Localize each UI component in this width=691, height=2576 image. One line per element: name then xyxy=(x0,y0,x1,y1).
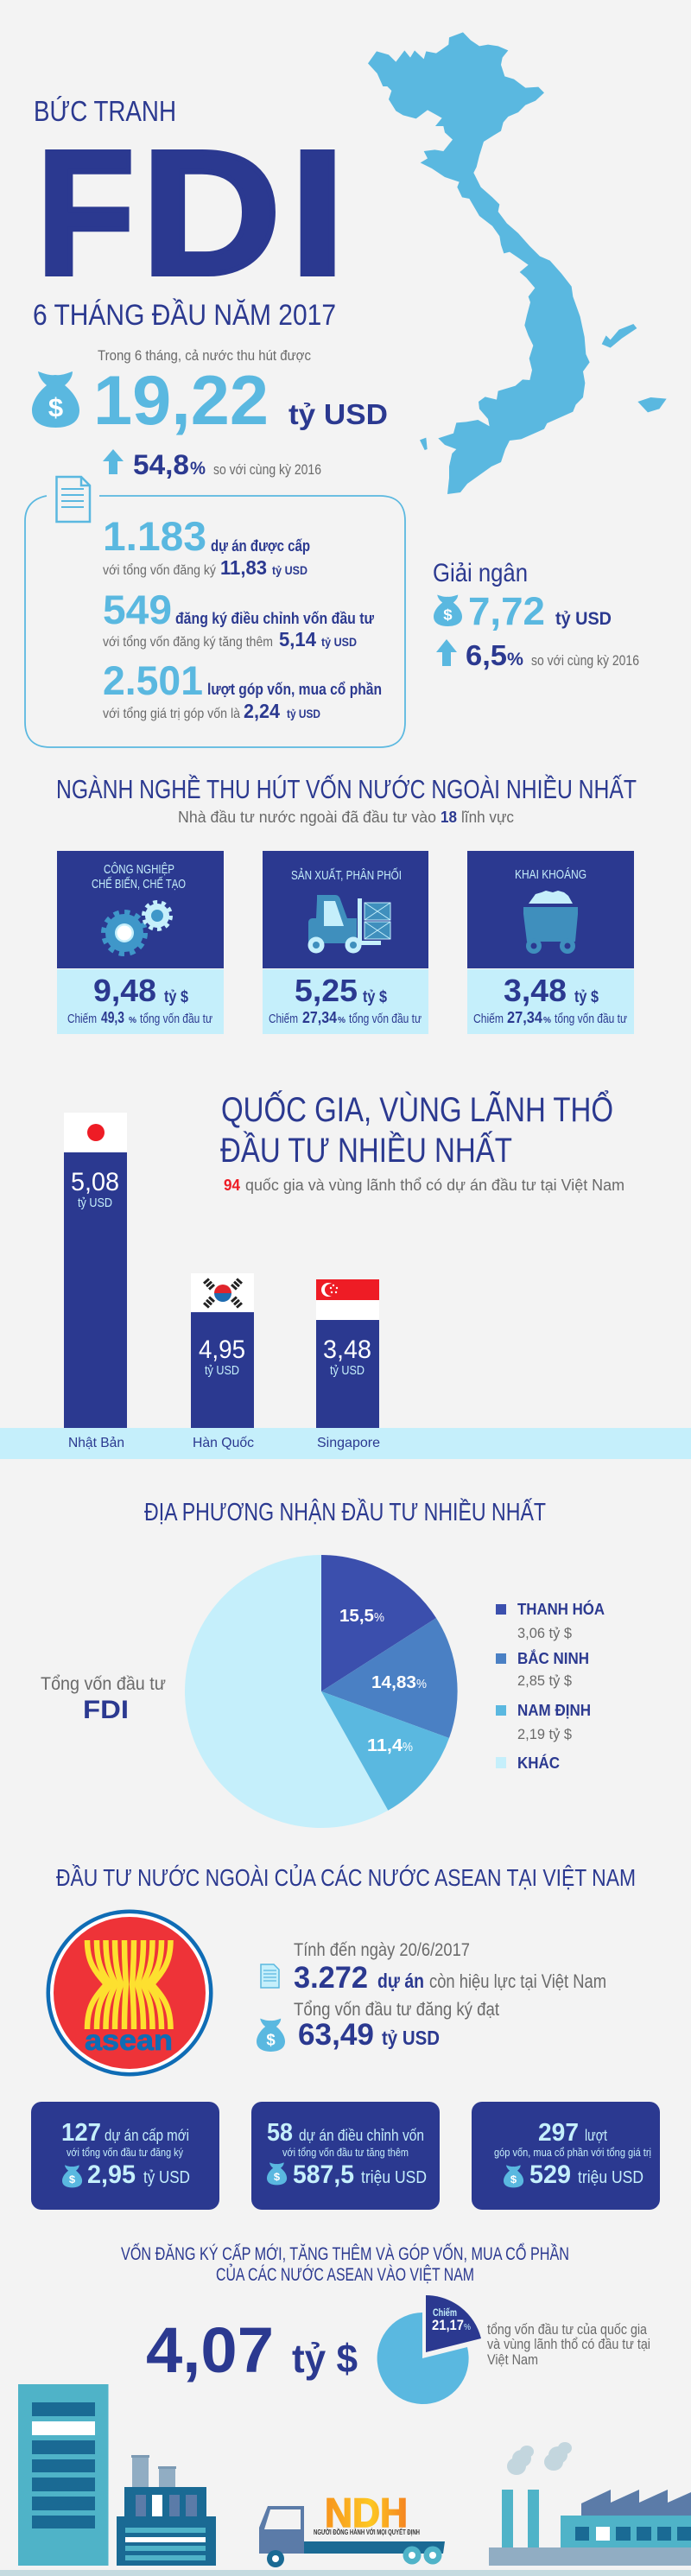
title: Bức tranh: BỨC TRANH xyxy=(34,95,176,127)
pie chart: 21,17%: 21,17 xyxy=(432,2317,464,2333)
heading: quốc gia, vùng lãnh thổ: ĐẦU TƯ NHIỀU NHẤT xyxy=(220,1130,512,1170)
panel: dự án: tỷ USD xyxy=(287,707,320,720)
panel: khai khoáng: % xyxy=(543,1016,551,1025)
pie chart: địa phương xyxy=(185,1555,458,1828)
card: dự án điều chỉnh vốn: với tổng vốn đầu tư tăng thêm xyxy=(282,2146,409,2159)
heading: quốc gia, vùng lãnh thổ: QUỐC GIA, VÙNG LÃNH THỔ xyxy=(221,1088,613,1129)
panel: sản xuất phân phối: 5,25 xyxy=(295,973,358,1008)
panel: dự án: tỷ USD xyxy=(321,635,357,649)
text block: ASEAN dự án: còn hiệu lực tại Việt Nam xyxy=(429,1970,606,1992)
subheading: 18 lĩnh vực: Nhà đầu tư nước ngoài đã đầu tư vào xyxy=(178,809,436,826)
heading: địa phương: ĐỊA PHƯƠNG NHẬN ĐẦU TƯ NHIỀU NHẤT xyxy=(144,1497,546,1526)
heading: vốn đăng ký: CỦA CÁC NƯỚC ASEAN VÀO VIỆT NAM xyxy=(216,2264,474,2285)
panel: sản xuất phân phối: % xyxy=(338,1016,346,1025)
panel: khai khoáng: 3,48 xyxy=(504,973,567,1008)
card: dự án điều chỉnh vốn: triệu USD xyxy=(361,2168,427,2187)
panel: khai khoáng: tỷ $ xyxy=(574,988,599,1006)
panel: công nghiệp chế biến: Chiếm xyxy=(67,1012,97,1026)
headline figure: tổng vốn thu hút: 19,22 xyxy=(93,362,269,440)
illustration: smoke xyxy=(507,2442,572,2475)
flag: Singapore xyxy=(316,1279,379,1320)
baseline band xyxy=(0,1428,691,1459)
panel: giải ngân: so với cùng kỳ 2016 xyxy=(531,652,639,669)
legend: THANH HÓA xyxy=(517,1600,605,1618)
illustration: factory xyxy=(117,2455,216,2566)
headline figure: tổng vốn thu hút: so với cùng kỳ 2016 xyxy=(213,461,321,478)
bar: Nhật Bản: 5,08 xyxy=(71,1168,119,1196)
card: dự án điều chỉnh vốn: 58 xyxy=(267,2119,293,2147)
icon: money bag: $ xyxy=(266,2030,276,2048)
card: lượt góp vốn: 529 xyxy=(529,2160,571,2189)
flag: Japan xyxy=(64,1113,127,1152)
bar: Hàn Quốc: tỷ USD xyxy=(205,1363,239,1378)
panel: công nghiệp chế biến: 49,3 xyxy=(101,1009,124,1026)
bar: Nhật Bản: tỷ USD xyxy=(78,1196,112,1210)
icon: money bag xyxy=(62,2165,82,2187)
subheading: 94 quốc gia: quốc gia và vùng lãnh thổ có dự án đầu tư tại Việt Nam xyxy=(245,1177,624,1194)
icon: money bag: $ xyxy=(69,2173,75,2186)
subtitle: 6 tháng đầu năm 2017: 6 THÁNG ĐẦU NĂM 2017 xyxy=(33,299,336,332)
subheading: 94 quốc gia: 94 xyxy=(224,1177,240,1194)
title: FDI: F xyxy=(37,114,135,312)
card: lượt góp vốn: góp vốn, mua cổ phần với tổng giá trị xyxy=(494,2146,651,2159)
panel: dự án: 5,14 xyxy=(279,628,316,650)
panel: công nghiệp chế biến: tổng vốn đầu tư xyxy=(140,1012,212,1026)
icon: money bag xyxy=(434,595,462,626)
card: dự án cấp mới: dự án cấp mới xyxy=(105,2127,189,2144)
subheading: 18 lĩnh vực: lĩnh vực xyxy=(461,809,514,826)
text block: tổng vốn đầu tư FDI xyxy=(41,1674,166,1724)
big figure: 4,07 tỷ $: tỷ $ xyxy=(292,2336,358,2381)
card: dự án cấp mới xyxy=(31,2102,219,2210)
card: dự án điều chỉnh vốn: 587,5 xyxy=(293,2160,354,2189)
panel: sản xuất phân phối xyxy=(263,851,428,1034)
panel: giải ngân: % xyxy=(507,650,523,669)
card: lượt góp vốn: triệu USD xyxy=(578,2168,643,2187)
card: dự án điều chỉnh vốn xyxy=(251,2102,440,2210)
legend: NAM ĐỊNH xyxy=(517,1702,591,1719)
panel: dự án: 2,24 xyxy=(244,700,280,722)
panel: giải ngân: 7,72 xyxy=(468,589,545,633)
bar: Singapore xyxy=(316,1279,380,1450)
text block: ASEAN dự án: tỷ USD xyxy=(382,2027,440,2049)
icon: forklift xyxy=(307,895,390,954)
text block: tổng vốn đầu tư: Việt Nam xyxy=(487,2351,538,2368)
logo: ASEAN: asean xyxy=(85,2024,173,2056)
legend: KHÁC xyxy=(517,1754,560,1772)
icon: up arrow xyxy=(436,639,457,666)
panel: sản xuất phân phối: tổng vốn đầu tư xyxy=(349,1012,422,1026)
pie chart: địa phương: % xyxy=(416,1677,427,1691)
panel: công nghiệp chế biến: CHẾ BIẾN, CHẾ TẠO xyxy=(92,877,186,891)
panel: giải ngân: tỷ USD xyxy=(555,609,612,629)
panel: dự án: với tổng giá trị góp vốn là xyxy=(103,706,240,721)
legend: BẮC NINH xyxy=(517,1649,589,1667)
illustration: truck xyxy=(259,2506,445,2567)
text block: tổng vốn đầu tư FDI: Tổng vốn đầu tư xyxy=(41,1674,166,1694)
legend: 2,85 tỷ $ xyxy=(517,1672,573,1689)
pie chart: địa phương: 14,83 xyxy=(371,1673,416,1692)
panel: dự án xyxy=(25,477,405,747)
panel: công nghiệp chế biến: CÔNG NGHIỆP xyxy=(104,862,174,877)
heading: vốn đăng ký: VỐN ĐĂNG KÝ CẤP MỚI, TĂNG THÊM VÀ GÓP VỐN, MUA CỔ PHẦN xyxy=(121,2243,569,2264)
panel: công nghiệp chế biến: tỷ $ xyxy=(164,988,188,1006)
text block: ASEAN dự án: Tổng vốn đầu tư đăng ký đạt xyxy=(294,2000,499,2020)
icon: document xyxy=(57,477,90,522)
icon: money bag xyxy=(504,2165,523,2187)
text block: ASEAN dự án: 63,49 xyxy=(298,2018,374,2052)
card: lượt góp vốn xyxy=(472,2102,660,2210)
subheading: 18 lĩnh vực: 18 xyxy=(441,809,457,826)
panel: dự án: với tổng vốn đăng ký tăng thêm xyxy=(103,634,273,650)
panel: dự án: dự án được cấp xyxy=(211,537,310,555)
panel: giải ngân: Giải ngân xyxy=(433,559,528,587)
card: dự án cấp mới: với tổng vốn đầu tư đăng ký xyxy=(67,2146,183,2159)
title: FDI xyxy=(37,114,345,312)
icon: mine cart xyxy=(523,891,578,954)
headline figure: tổng vốn thu hút: 54,8 xyxy=(133,449,189,480)
panel: khai khoáng: 27,34 xyxy=(507,1009,542,1026)
map: Vietnam xyxy=(368,32,667,494)
headline figure: tổng vốn thu hút: Trong 6 tháng, cả nước thu hút được xyxy=(98,347,311,364)
ground band xyxy=(0,2570,691,2576)
bar: Nhật Bản: Nhật Bản xyxy=(68,1436,124,1450)
legend: 3,06 tỷ $ xyxy=(517,1625,573,1641)
panel: dự án: 2.501 xyxy=(103,657,203,703)
text block: ASEAN dự án: Tính đến ngày 20/6/2017 xyxy=(294,1940,470,1960)
pie chart: 21,17% xyxy=(377,2295,481,2404)
icon: money bag: $ xyxy=(274,2170,280,2183)
text block: tổng vốn đầu tư: và vùng lãnh thổ có đầu tư tại xyxy=(487,2336,650,2352)
logo: NDH: NDH xyxy=(325,2490,408,2535)
panel: khai khoáng xyxy=(467,851,634,1034)
icon: money bag xyxy=(257,2019,285,2052)
panel: công nghiệp chế biến: 9,48 xyxy=(93,973,156,1008)
legend xyxy=(496,1600,605,1772)
bar: Hàn Quốc: Hàn Quốc xyxy=(193,1436,254,1450)
card: dự án cấp mới: 127 xyxy=(61,2119,101,2147)
panel: dự án: lượt góp vốn, mua cổ phần xyxy=(207,681,382,698)
logo: ASEAN xyxy=(47,1909,212,2077)
text block: ASEAN dự án xyxy=(257,1940,606,2052)
icon: up arrow xyxy=(103,449,124,474)
card: dự án cấp mới: tỷ USD xyxy=(143,2168,190,2187)
bar: Nhật Bản xyxy=(64,1113,127,1450)
panel: dự án: đăng ký điều chỉnh vốn đầu tư xyxy=(175,610,375,627)
panel: giải ngân: 6,5 xyxy=(466,639,507,671)
bar: Singapore: tỷ USD xyxy=(330,1363,365,1378)
card: lượt góp vốn: 297 xyxy=(538,2119,579,2147)
panel: công nghiệp chế biến: % xyxy=(129,1016,136,1025)
pie chart: địa phương: 15,5 xyxy=(339,1607,374,1626)
icon: money bag: $ xyxy=(510,2173,517,2186)
headline figure: tổng vốn thu hút: tỷ USD xyxy=(288,398,388,430)
panel: công nghiệp chế biến xyxy=(57,851,224,1034)
panel: sản xuất phân phối: Chiếm xyxy=(269,1012,298,1026)
panel: dự án: với tổng vốn đăng ký xyxy=(103,562,216,578)
illustration: factory with chimneys xyxy=(489,2490,691,2566)
flag: South Korea xyxy=(191,1273,254,1312)
text block: ASEAN dự án: dự án xyxy=(377,1970,424,1992)
title: FDI: D xyxy=(142,114,281,312)
panel: giải ngân xyxy=(433,559,639,671)
panel: khai khoáng: KHAI KHOÁNG xyxy=(515,867,586,882)
pie chart: 21,17%: % xyxy=(464,2323,471,2332)
panel: dự án: 549 xyxy=(103,587,172,632)
illustration: office building xyxy=(18,2384,109,2566)
text block: ASEAN dự án: 3.272 xyxy=(294,1961,368,1995)
legend: 2,19 tỷ $ xyxy=(517,1726,573,1742)
panel: sản xuất phân phối: tỷ $ xyxy=(363,988,387,1006)
icon: document xyxy=(261,1964,279,1988)
icon: gears xyxy=(104,902,171,954)
panel: khai khoáng: Chiếm xyxy=(473,1012,504,1026)
text block: tổng vốn đầu tư: tổng vốn đầu tư của quốc gia xyxy=(487,2321,647,2338)
panel: khai khoáng: tổng vốn đầu tư xyxy=(555,1012,627,1026)
pie chart: địa phương: % xyxy=(374,1610,384,1625)
pie chart: địa phương: % xyxy=(403,1740,413,1754)
card: dự án điều chỉnh vốn: dự án điều chỉnh vốn xyxy=(299,2127,424,2144)
icon: money bag: $ xyxy=(443,606,453,624)
headline figure: tổng vốn thu hút: % xyxy=(190,459,206,479)
heading: quốc gia, vùng lãnh thổ xyxy=(220,1088,613,1170)
card: dự án cấp mới: 2,95 xyxy=(87,2160,136,2189)
bar: Hàn Quốc: 4,95 xyxy=(199,1336,245,1364)
panel: dự án: 1.183 xyxy=(103,513,206,559)
text block: tổng vốn đầu tư xyxy=(487,2321,650,2368)
headline figure: tổng vốn thu hút xyxy=(32,347,388,480)
title: FDI: I xyxy=(290,114,345,312)
panel: sản xuất phân phối: SẢN XUẤT, PHÂN PHỐI xyxy=(291,867,402,883)
bar: Singapore: Singapore xyxy=(317,1436,380,1450)
bar: Hàn Quốc xyxy=(191,1273,254,1450)
card: lượt góp vốn: lượt xyxy=(585,2127,607,2144)
big figure: 4,07 tỷ $ xyxy=(146,2314,358,2386)
bar: Singapore: 3,48 xyxy=(323,1336,371,1364)
logo: NDH: NGƯỜI ĐỒNG HÀNH VỚI MỌI QUYẾT ĐỊNH xyxy=(314,2528,420,2536)
panel: sản xuất phân phối: 27,34 xyxy=(302,1009,337,1026)
pie chart: 21,17%: Chiếm xyxy=(433,2306,457,2319)
text block: tổng vốn đầu tư FDI: FDI xyxy=(83,1696,129,1724)
panel: dự án: 11,83 xyxy=(220,556,267,579)
icon: money bag xyxy=(267,2162,287,2185)
big figure: 4,07 tỷ $: 4,07 xyxy=(146,2314,274,2386)
icon: money bag: $ xyxy=(48,392,63,422)
pie chart: địa phương: 11,4 xyxy=(367,1736,403,1755)
heading: vốn đăng ký xyxy=(121,2243,569,2285)
icon: money bag xyxy=(32,371,79,428)
panel: dự án: tỷ USD xyxy=(272,563,307,577)
